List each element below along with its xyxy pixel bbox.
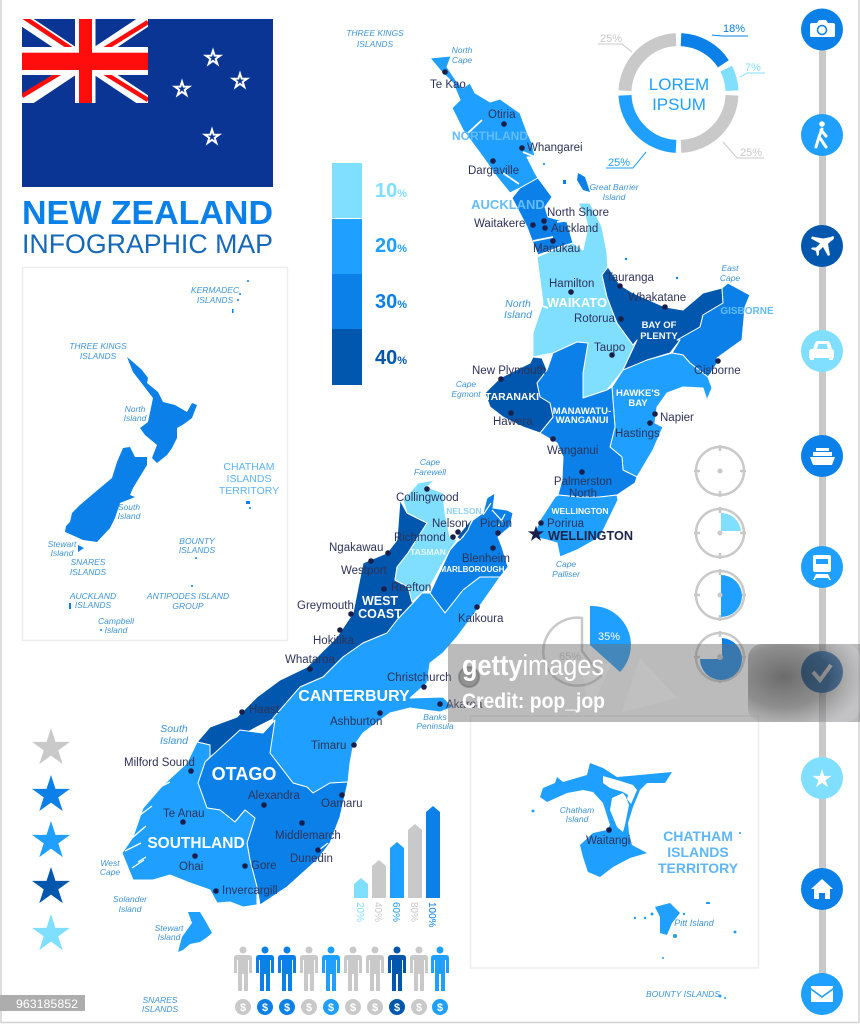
city labels: New Plymouth <box>472 365 546 377</box>
region: Nelson <box>457 517 473 540</box>
Chatham territory title <box>658 828 739 876</box>
overview map: Chatham label: TERRITORY <box>219 485 279 497</box>
geographic feature labels: ISLANDS <box>142 1004 179 1014</box>
geographic feature labels: Palliser <box>552 569 581 579</box>
overview map labels: ISLANDS <box>179 545 216 555</box>
city labels: Hamilton <box>549 278 594 290</box>
title <box>22 194 273 259</box>
Great Barrier Island <box>577 173 590 192</box>
panel: overview map inset <box>22 268 288 640</box>
geographic feature labels: Island <box>119 904 142 914</box>
city labels: North <box>569 488 597 500</box>
city labels: Waitakere <box>474 218 525 230</box>
city labels: Richmond <box>394 532 446 544</box>
donut centre text <box>649 75 709 114</box>
title: INFOGRAPHIC MAP <box>22 229 273 259</box>
overview map labels: BOUNTY <box>179 536 216 546</box>
star legend <box>32 728 70 950</box>
region labels: WANGANUI <box>556 415 608 426</box>
region: Marlborough <box>430 493 513 613</box>
donut callouts: 18% <box>723 23 745 35</box>
geographic feature labels: Cape <box>420 457 440 467</box>
region labels: AUCKLAND <box>471 197 545 212</box>
title: NEW ZEALAND <box>22 194 273 231</box>
geographic feature labels: Island <box>158 932 181 942</box>
icon: airplane <box>801 225 843 267</box>
region labels: OTAGO <box>212 764 276 784</box>
Chatham Island shape <box>540 763 672 877</box>
bar labels: 40% <box>372 902 383 922</box>
geographic feature labels: Cape <box>452 55 472 65</box>
city labels: Reefton <box>391 582 431 594</box>
region labels: MANAWATU- <box>553 406 611 417</box>
region labels: WELLINGTON <box>552 506 608 516</box>
image id tag: 963185852 <box>16 997 78 1011</box>
region: Gisborne <box>672 283 750 377</box>
overview map labels: Island <box>118 511 141 521</box>
city labels: Taupo <box>594 342 625 354</box>
donut callouts: 25% <box>600 33 622 45</box>
percentage colour legend <box>332 163 407 385</box>
region labels: CANTERBURY <box>298 688 410 705</box>
city labels: Collingwood <box>396 492 459 504</box>
icon: car <box>801 330 843 372</box>
clock: quarter <box>694 507 746 559</box>
donut centre text: IPSUM <box>652 95 706 114</box>
donut callouts: 7% <box>745 62 761 74</box>
dollar coin row: $ <box>284 1002 290 1014</box>
Dunedin harbour <box>319 843 328 850</box>
city labels: Haast <box>249 704 280 716</box>
geographic feature labels <box>100 28 740 1014</box>
percentage colour legend: 40% <box>375 347 407 369</box>
overview map labels: ISLANDS <box>75 600 112 610</box>
icon: home <box>801 868 843 910</box>
overview map labels: AUCKLAND <box>69 591 116 601</box>
city labels: Kaikoura <box>458 613 504 625</box>
overview map labels: Stewart <box>48 539 77 549</box>
city labels: North Shore <box>547 207 609 219</box>
region: Hawke's Bay <box>610 353 712 477</box>
city labels: Dunedin <box>290 853 333 865</box>
overview map labels: ISLANDS <box>80 351 117 361</box>
geographic feature labels: THREE KINGS <box>346 28 404 38</box>
geographic feature labels: Great Barrier <box>589 182 640 192</box>
region labels: NELSON <box>446 506 482 516</box>
icon: train <box>801 546 843 588</box>
geographic feature labels: Cape <box>456 379 476 389</box>
geographic feature labels: Island <box>160 735 189 747</box>
city labels: Tauranga <box>606 272 655 284</box>
dollar coin row <box>235 999 448 1015</box>
Waitangi town: Waitangi <box>586 835 630 847</box>
donut chart <box>598 23 765 169</box>
city labels: Ashburton <box>330 716 382 728</box>
geographic feature labels: East <box>721 263 739 273</box>
city labels: Akaroa <box>446 699 483 711</box>
geographic feature labels: BOUNTY ISLANDS <box>646 989 720 999</box>
city labels: Hastings <box>615 428 660 440</box>
city labels: Invercargill <box>222 885 278 897</box>
capital star: Wellington <box>528 526 544 541</box>
small Chatham islets <box>532 810 741 999</box>
city dots <box>180 69 721 894</box>
region: Canterbury <box>270 577 500 793</box>
Pitt Island shape <box>655 903 680 935</box>
icon: check mark <box>801 651 843 693</box>
icon: ship <box>801 435 843 477</box>
city labels: Porirua <box>547 518 585 530</box>
dollar coin row: $ <box>328 1002 334 1014</box>
city labels: Gisborne <box>694 365 741 377</box>
region: Bay of Plenty <box>602 267 723 378</box>
region labels: WAIKATO <box>547 295 607 310</box>
city labels: Manukau <box>533 243 580 255</box>
geographic feature labels: Island <box>504 309 533 321</box>
city labels: Whakatane <box>628 292 686 304</box>
city labels: Nelson <box>432 518 468 530</box>
Chatham lagoon south <box>610 793 629 832</box>
region: Waikato <box>533 203 637 398</box>
city labels: Ohai <box>179 861 203 873</box>
panel: Chatham Islands inset <box>470 716 758 999</box>
geographic feature labels: SNARES <box>143 995 178 1005</box>
region: Taranaki <box>485 357 553 433</box>
Chatham territory title: TERRITORY <box>658 860 739 876</box>
clock: three quarters <box>694 631 746 683</box>
geographic feature labels: North <box>505 298 531 310</box>
icon: walking person <box>801 114 843 156</box>
image id tag <box>0 995 85 1011</box>
overview map: Chatham label <box>219 461 279 497</box>
city labels: Auckland <box>551 223 598 235</box>
people pictogram row <box>234 946 449 991</box>
dollar coin row: $ <box>306 1002 312 1014</box>
region: Tasman <box>395 480 457 602</box>
bar labels: 100% <box>426 902 437 928</box>
overview map labels: KERMADEC <box>191 285 240 295</box>
region labels: TARANAKI <box>485 391 539 403</box>
city labels: Palmerston <box>554 476 612 488</box>
bar labels: 20% <box>354 902 365 922</box>
geographic feature labels: Stewart <box>155 923 184 933</box>
Chatham territory title: CHATHAM <box>663 828 733 844</box>
dollar coin row: $ <box>416 1002 422 1014</box>
harbour inlets <box>468 120 570 308</box>
region labels: BAY <box>628 398 648 409</box>
city labels: Alexandra <box>248 790 300 802</box>
city labels: Greymouth <box>297 600 354 612</box>
region labels: GISBORNE <box>720 306 774 317</box>
donut callouts: 25% <box>608 157 630 169</box>
city labels: Wanganui <box>547 445 598 457</box>
dollar coin row: $ <box>394 1002 400 1014</box>
geographic feature labels: South <box>160 723 188 735</box>
city labels: Milford Sound <box>124 757 195 769</box>
region labels: COAST <box>358 607 402 621</box>
geographic feature labels: Solander <box>113 894 148 904</box>
geographic feature labels: Egmont <box>451 389 481 399</box>
region: Northland <box>430 56 538 193</box>
geographic feature labels: Cape <box>720 273 740 283</box>
city labels: Hokitika <box>313 635 355 647</box>
pie chart 35 / 65: 35% <box>598 631 620 643</box>
overview map labels: Island <box>105 625 128 635</box>
region labels <box>147 129 774 852</box>
offshore islets <box>543 163 678 279</box>
Marlborough sounds white <box>483 503 505 527</box>
overview map labels: SNARES <box>71 557 106 567</box>
Chatham labels: Pitt Island <box>674 918 715 928</box>
pie chart 35 / 65: 65% <box>559 651 581 663</box>
city labels: Christchurch <box>387 672 452 684</box>
Chatham labels <box>560 805 715 928</box>
city labels: WELLINGTON <box>548 529 633 543</box>
donut callouts: 25% <box>740 147 762 159</box>
overview map labels: Campbell <box>98 616 135 626</box>
geographic feature labels: Cape <box>100 867 120 877</box>
icon: camera <box>801 8 843 50</box>
flag of New Zealand <box>22 16 273 187</box>
city labels: Ngakawau <box>329 542 383 554</box>
city labels: Whataroa <box>285 654 335 666</box>
city labels: Blenheim <box>462 553 510 565</box>
geographic feature labels: Banks <box>423 712 448 722</box>
city labels: Napier <box>660 412 694 424</box>
Chatham labels: Chatham <box>560 805 594 815</box>
overview map: Chatham label: CHATHAM <box>223 461 275 473</box>
overview map labels: Island <box>51 548 74 558</box>
city labels: Otiria <box>488 109 516 121</box>
watermark text: gettyimages <box>462 650 604 682</box>
icon: star <box>801 757 843 799</box>
region labels: NORTHLAND <box>452 129 528 143</box>
overview map: North Island <box>127 357 197 463</box>
Stewart Island <box>178 912 212 952</box>
dollar coin row: $ <box>437 1002 443 1014</box>
Chatham lagoon <box>603 776 637 804</box>
city labels: Middlemarch <box>275 830 341 842</box>
city labels: Te Kao <box>430 79 466 91</box>
percentage colour legend: 10% <box>375 180 407 202</box>
city labels: Whangarei <box>527 142 583 154</box>
region labels: WEST <box>362 594 398 608</box>
city labels <box>124 79 741 897</box>
city labels: Timaru <box>311 740 346 752</box>
city labels: Dargaville <box>468 165 519 177</box>
overview map: small islands <box>69 280 251 631</box>
donut centre text: LOREM <box>649 75 709 94</box>
geographic feature labels: Farewell <box>414 467 447 477</box>
city labels: Rotorua <box>574 313 616 325</box>
overview map labels: North <box>125 404 146 414</box>
watermark text: Credit: pop_jop <box>462 690 605 713</box>
dollar coin row: $ <box>372 1002 378 1014</box>
percentage colour legend: 20% <box>375 235 407 257</box>
city labels: Oamaru <box>321 798 363 810</box>
Waitangi town <box>586 827 630 847</box>
map: South Island <box>122 480 513 952</box>
city labels: Hawera <box>493 416 533 428</box>
overview map: South Island <box>65 447 147 542</box>
region labels: SOUTHLAND <box>147 835 245 852</box>
overview map labels: South <box>118 502 140 512</box>
geographic feature labels: ISLANDS <box>357 39 394 49</box>
bar labels <box>354 902 437 928</box>
bar labels: 80% <box>408 902 419 922</box>
watermark banner <box>448 644 860 722</box>
geographic feature labels: West <box>100 858 120 868</box>
region labels: HAWKE'S <box>616 388 660 399</box>
city labels: Picton <box>480 518 512 530</box>
city labels: Westport <box>341 565 388 577</box>
region labels: BAY OF <box>642 320 677 331</box>
region: West Coast <box>197 500 427 757</box>
Chatham territory title: ISLANDS <box>667 844 729 860</box>
geographic feature labels: Peninsula <box>416 721 454 731</box>
overview map labels: Island <box>124 413 147 423</box>
icon: envelope <box>801 973 843 1015</box>
bar chart <box>354 806 440 928</box>
city labels: Te Anau <box>163 808 205 820</box>
region: Southland <box>122 742 257 907</box>
faint watermark shapes <box>582 658 677 712</box>
region: Manawatu-Wanganui <box>537 342 637 497</box>
overview map labels: THREE KINGS <box>69 341 127 351</box>
overview map labels: GROUP <box>172 601 204 611</box>
clock: half <box>694 569 746 621</box>
city labels: Gore <box>251 860 277 872</box>
geographic feature labels: Cape <box>556 559 576 569</box>
geographic feature labels: Island <box>603 192 626 202</box>
percentage colour legend: 30% <box>375 291 407 313</box>
dollar coin row: $ <box>240 1002 246 1014</box>
icon timeline <box>801 8 843 1015</box>
Chatham labels: Island <box>566 814 589 824</box>
region labels: TASMAN <box>410 547 446 557</box>
region labels: MARLBOROUGH <box>440 565 505 574</box>
overview map: Chatham label: ISLANDS <box>227 473 271 485</box>
map: North Island <box>430 56 750 557</box>
clock: empty <box>694 445 746 497</box>
region labels: PLENTY <box>640 331 678 342</box>
overview map labels <box>48 285 240 635</box>
overview map labels: ISLANDS <box>197 295 234 305</box>
region: Otago <box>198 720 348 905</box>
overview map labels: ANTIPODES ISLAND <box>146 591 229 601</box>
overview map labels: ISLANDS <box>70 567 107 577</box>
region: Auckland <box>512 178 573 255</box>
region: Wellington <box>533 495 618 557</box>
clock charts <box>694 445 746 683</box>
dollar coin row: $ <box>262 1002 268 1014</box>
donut callouts <box>598 23 765 169</box>
pie chart 35 / 65 <box>543 606 631 686</box>
fjord inlets <box>125 782 170 868</box>
geographic feature labels: North <box>452 45 473 55</box>
dollar coin row: $ <box>350 1002 356 1014</box>
watermark text <box>462 650 605 713</box>
bar labels: 60% <box>390 902 401 922</box>
